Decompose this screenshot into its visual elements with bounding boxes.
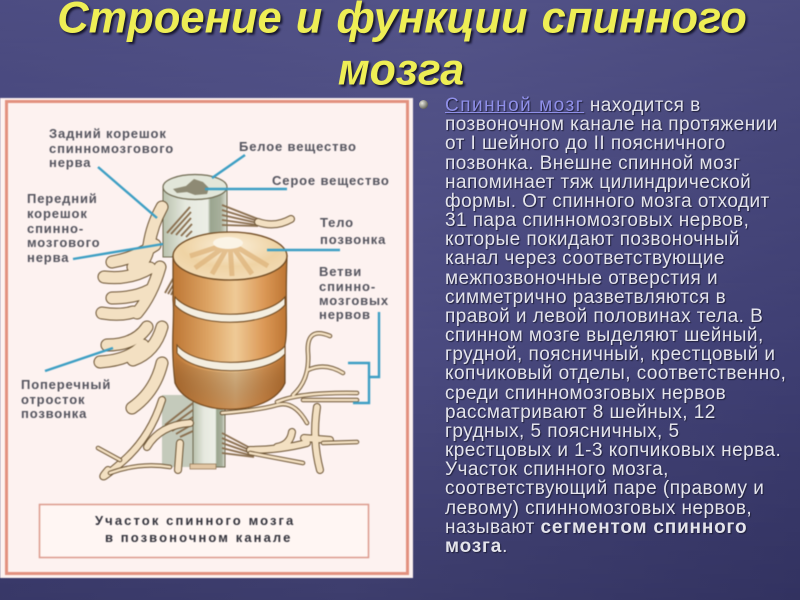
icon: nerve rootlet fans (165, 205, 258, 457)
label: nerve branches: спинно- (319, 279, 376, 294)
text block: spinal cord description: Участок спинного мозга, (445, 459, 669, 480)
icon: vertebrae stack (173, 232, 287, 409)
text block: spinal cord description: напоминает тяж цилиндрической (445, 172, 751, 193)
label: posterior root: спинномозгового (49, 141, 174, 156)
label: posterior root: нерва (49, 155, 91, 170)
text block: spinal cord description: называют сегментом спинного (445, 517, 747, 538)
label: anterior root: Передний (27, 191, 98, 206)
text block: spinal cord description: мозга. (445, 536, 508, 557)
label: transverse process: Поперечный (21, 377, 111, 392)
text block: spinal cord description: правой и левой половинах тела. В (445, 306, 763, 327)
caption box: Участок спинного мозга (95, 513, 295, 528)
label: anterior root: спинно- (27, 221, 84, 236)
text block: spinal cord description: соответствующий паре (правому и (445, 478, 764, 499)
label: nerve branches: мозговых (319, 293, 389, 308)
text block: spinal cord description: которые покидают позвоночный (445, 229, 740, 250)
label: transverse process: отросток (21, 392, 85, 407)
text block: spinal cord description: рассматривают 8 шейных, 12 (445, 402, 716, 423)
text block: spinal cord description: симметрично разветвляются в (445, 287, 726, 308)
text block: spinal cord description: Спинной мозг находится в (445, 95, 701, 116)
panel: spinal cord diagram (0, 97, 414, 579)
label: vertebral body: Тело (320, 215, 354, 230)
label: transverse process: позвонка (21, 406, 87, 421)
text block: spinal cord description: позвоночном канале на протяжении (445, 114, 778, 135)
text block: spinal cord description: позвонка. Внешне спинной мозг (445, 152, 740, 174)
label: posterior root: Задний корешок (49, 126, 167, 141)
icon: transverse processes and nerves (98, 207, 357, 476)
text block: spinal cord description: формы. От спинного мозга отходит (445, 191, 770, 212)
label: anterior root: корешок (27, 206, 88, 221)
icon: spinal cord column (162, 174, 227, 469)
label: anterior root: мозгового (27, 235, 100, 250)
text block: spinal cord description: от I шейного до II поясничного (445, 133, 726, 154)
text block: spinal cord description: копчиковый отделы, соответственно, (445, 363, 786, 384)
title: мозга (338, 45, 464, 95)
caption box: в позвоночном канале (105, 530, 292, 545)
text block: spinal cord description: спинном мозге выделяют шейный, (445, 325, 764, 346)
label: vertebral body: позвонка (320, 232, 386, 247)
text block: spinal cord description: среди спинномозговых нервов (445, 383, 726, 404)
label: nerve branches: Ветви (319, 264, 362, 279)
caption box (40, 504, 368, 558)
text block: spinal cord description: 31 пара спинномозговых нервов, (445, 210, 749, 231)
text block: spinal cord description: канал через соответствующие (445, 248, 725, 269)
text block: spinal cord description: грудной, поясничный, крестцовый и (445, 344, 775, 365)
label: anterior root: нерва (27, 250, 69, 265)
icon: bullet (419, 100, 428, 109)
label: white matter: Белое вещество (239, 139, 357, 154)
text block: spinal cord description: левому) спинномозговых нервов, (445, 498, 752, 519)
label: gray matter: Серое вещество (272, 173, 390, 188)
text block: spinal cord description: межпозвоночные отверстия и (445, 268, 718, 289)
text block: spinal cord description (445, 95, 786, 557)
text block: spinal cord description: крестцовых и 1-3 копчиковых нерва. (445, 440, 781, 461)
icon: blue leader lines (45, 155, 379, 403)
text block: spinal cord description: грудных, 5 поясничных, 5 (445, 421, 680, 442)
title (57, 0, 749, 95)
label: nerve branches: нервов (319, 307, 371, 322)
